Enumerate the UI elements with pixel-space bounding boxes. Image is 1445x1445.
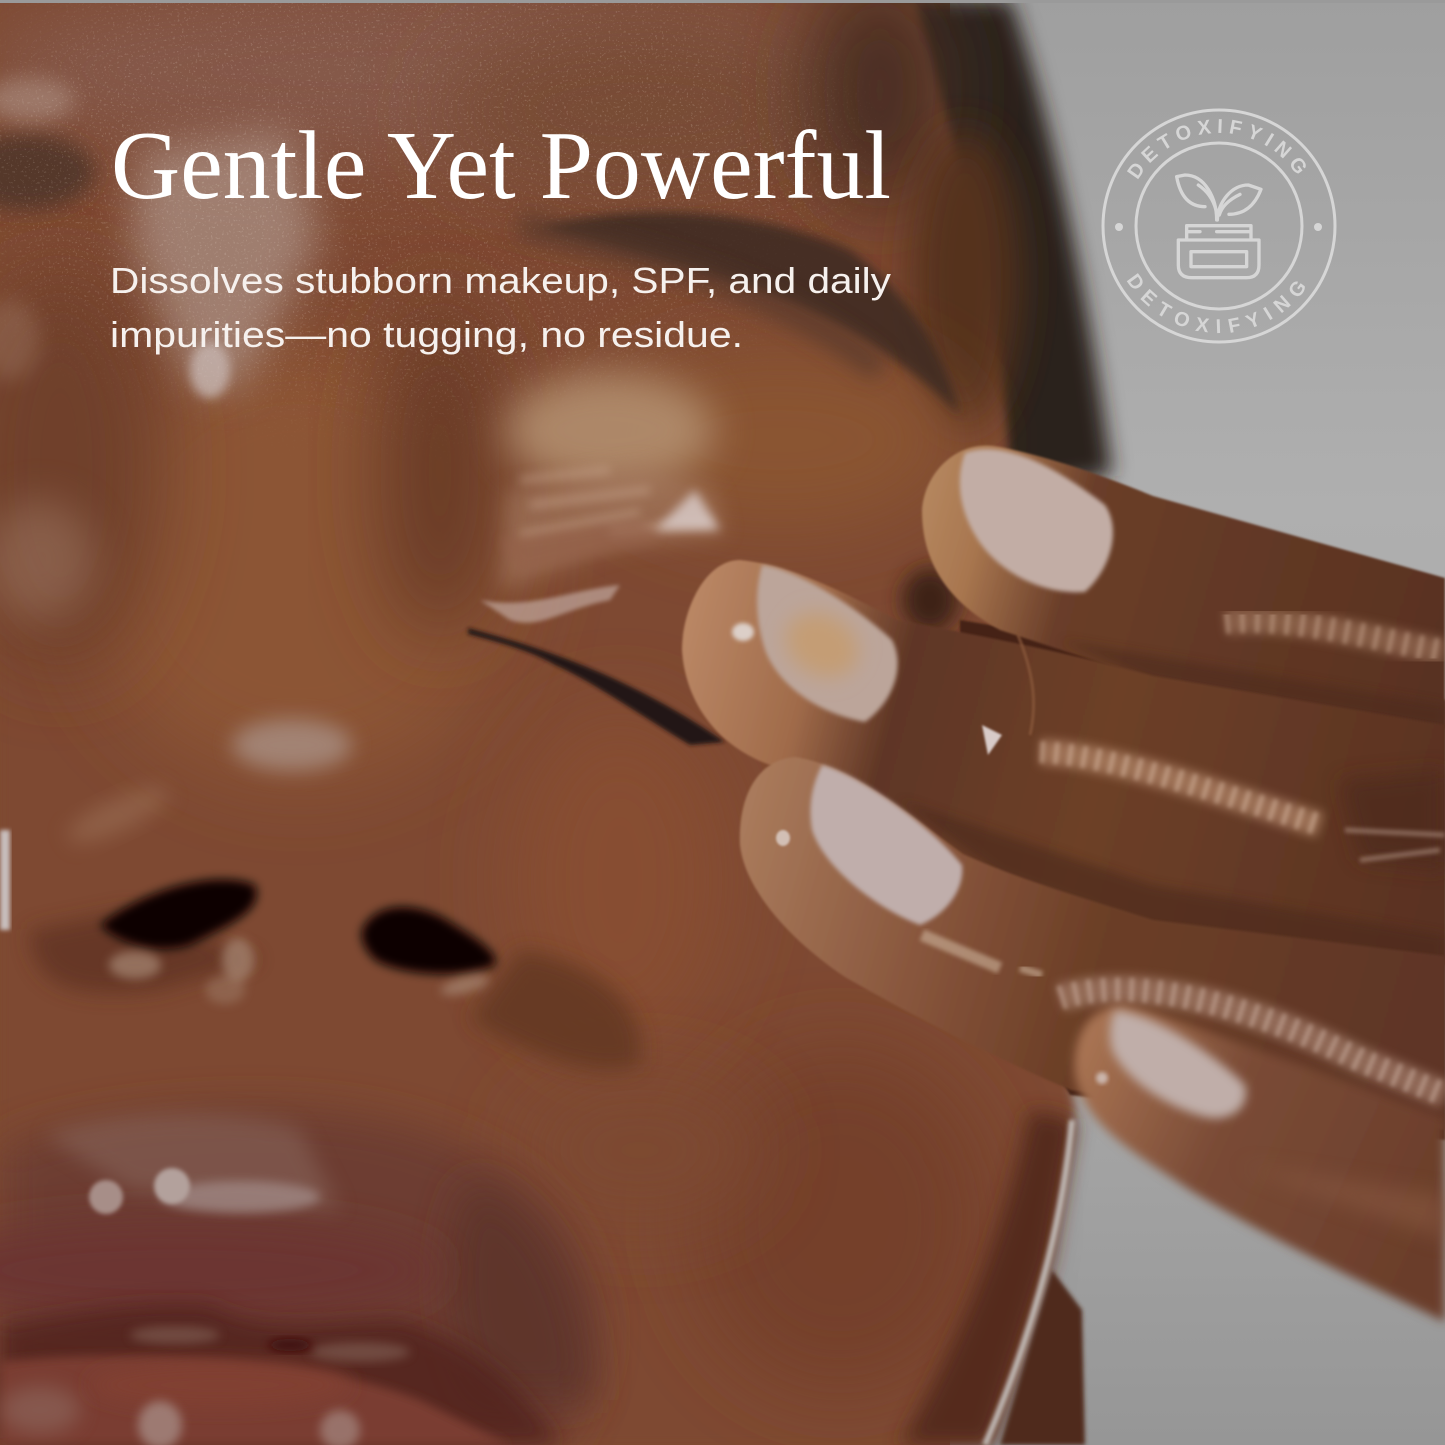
skin texture speckle <box>0 3 854 420</box>
fingernail <box>810 765 962 925</box>
subtitle text block: Dissolves stubborn makeup, SPF, and daily <box>110 260 891 301</box>
badge text: bottom arc: DETOXIFYING <box>1126 273 1305 334</box>
closed eyelashes <box>468 628 725 745</box>
lip highlights <box>0 1114 360 1445</box>
icon: plant growing from jar <box>1177 175 1261 278</box>
forehead gloss <box>0 78 320 620</box>
badge: detoxifying seal <box>1102 108 1336 344</box>
title: Gentle Yet Powerful <box>111 112 891 220</box>
background: grey studio wall <box>950 0 1445 1445</box>
shadow between fingers and cheek <box>902 568 958 632</box>
finger: index <box>922 445 1445 730</box>
nostril rim highlights <box>109 938 491 1004</box>
left eyebrow <box>0 134 95 210</box>
nostrils <box>100 879 496 974</box>
finger: pinky <box>1075 1005 1445 1322</box>
eyelid gloss <box>480 372 725 623</box>
fingernail <box>757 565 898 722</box>
finger: middle <box>682 560 1445 965</box>
hair at the temple <box>890 0 1112 500</box>
lips <box>0 1108 598 1445</box>
fingernail <box>1110 1010 1246 1118</box>
subtitle text block: impurities—no tugging, no residue. <box>110 314 743 355</box>
nose shadow <box>30 910 641 1070</box>
badge text: top arc: DETOXIFYING <box>1127 119 1306 179</box>
nose highlight <box>0 719 352 930</box>
neck and jaw edge <box>1000 1270 1085 1445</box>
finger: ring <box>740 757 1445 1130</box>
subtitle text block <box>110 260 891 355</box>
face skin <box>0 0 1075 1445</box>
fingernail <box>960 449 1113 592</box>
hand backing shadow <box>960 620 1445 1140</box>
right eyebrow <box>520 212 960 415</box>
